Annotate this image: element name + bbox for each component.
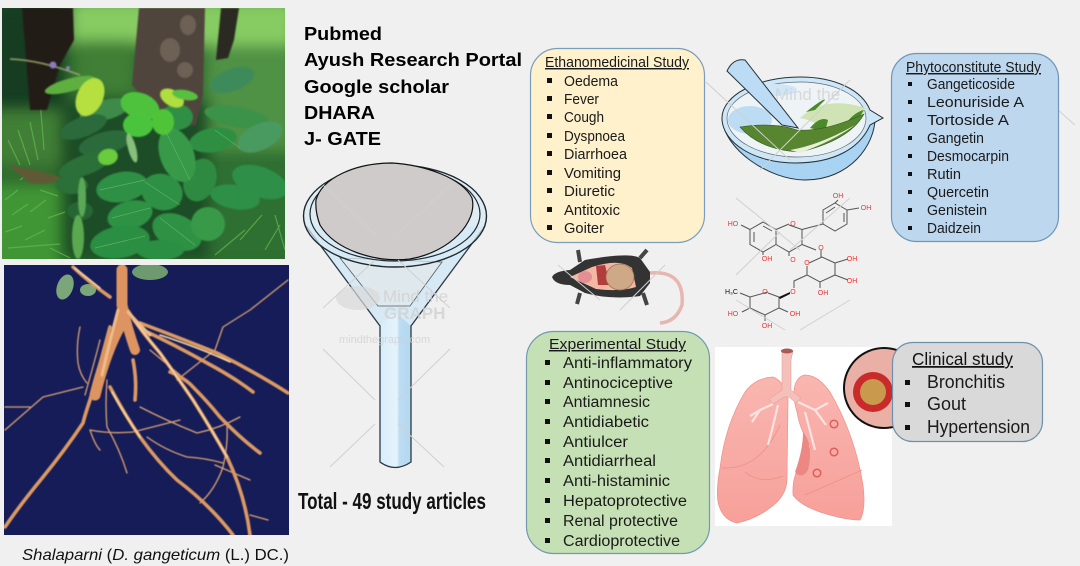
icon: flavonoid chemical structure: OH <box>861 205 871 212</box>
caption: species name: Shalaparni (D. gangeticum (L.) DC.) <box>22 547 289 564</box>
panel: Ethanomedicinal Study: Oedema <box>564 74 619 90</box>
panel: Clinical study <box>892 342 1042 442</box>
panel: Ethanomedicinal Study: Diuretic <box>564 184 615 200</box>
panel: Phytoconstitute Study: Phytoconstitute Study <box>906 60 1042 76</box>
panel: Phytoconstitute Study: Desmocarpin <box>927 149 1009 165</box>
panel: Ethanomedicinal Study: Antitoxic <box>564 203 620 219</box>
icon: flavonoid chemical structure: OH <box>818 290 828 297</box>
panel: Ethanomedicinal Study: Dyspnoea <box>564 129 626 145</box>
panel: Ethanomedicinal Study: Goiter <box>564 221 604 237</box>
list of databases: J- GATE <box>304 128 381 149</box>
panel: Phytoconstitute Study: Tortoside A <box>927 113 1009 129</box>
illustration: lungs <box>715 347 892 526</box>
panel: Clinical study: Hypertension <box>927 417 1030 437</box>
panel: Clinical study: Gout <box>927 394 966 414</box>
panel: Phytoconstitute Study <box>892 54 1058 242</box>
icon: flavonoid chemical structure: HO <box>728 311 739 318</box>
photo: Shalaparni plant <box>2 8 285 259</box>
panel: Phytoconstitute Study: Leonuriside A <box>927 95 1024 111</box>
panel: Experimental Study: Hepatoprotective <box>563 493 687 510</box>
panel: Experimental Study: Renal protective <box>563 513 678 530</box>
text: Mind the <box>775 85 840 104</box>
panel: Experimental Study: Antidiabetic <box>563 414 649 431</box>
icon: flavonoid chemical structure: O <box>790 221 796 228</box>
panel: Ethanomedicinal Study: Ethanomedicinal Study <box>545 55 690 71</box>
panel: Experimental Study: Antiulcer <box>563 434 628 451</box>
icon: filter funnel <box>304 163 486 468</box>
icon: flavonoid chemical structure: OH <box>833 193 843 200</box>
panel: Ethanomedicinal Study: Fever <box>564 92 599 108</box>
panel: Experimental Study: Antiamnesic <box>563 394 650 411</box>
panel: Experimental Study: Experimental Study <box>549 337 687 353</box>
panel: Experimental Study: Antinociceptive <box>563 375 673 392</box>
panel: Phytoconstitute Study: Daidzein <box>927 221 981 237</box>
photo: Shalaparni root <box>4 264 289 535</box>
icon: bronchus cross-section <box>843 347 897 429</box>
panel: Experimental Study: Anti-inflammatory <box>563 355 692 372</box>
text: GRAPH <box>384 304 445 323</box>
funnel total label: Total - 49 study articles <box>298 488 486 514</box>
text: mindthegraph.com <box>339 334 430 346</box>
icon: dissected mouse <box>552 250 682 323</box>
panel: Phytoconstitute Study: Genistein <box>927 203 987 219</box>
icon: flavonoid chemical structure: H₃C <box>725 289 738 296</box>
panel: Clinical study: Clinical study <box>912 349 1013 369</box>
icon: flavonoid chemical structure: O <box>790 289 796 296</box>
panel: Experimental Study: Anti-histaminic <box>563 473 670 490</box>
list of databases: Pubmed <box>304 23 382 44</box>
panel: Ethanomedicinal Study: Vomiting <box>564 166 621 182</box>
list of databases: Google scholar <box>304 76 449 97</box>
list of databases: DHARA <box>304 102 375 123</box>
icon: flavonoid chemical structure: O <box>804 260 810 267</box>
icon: mortar with leaf <box>722 60 883 180</box>
list of databases <box>304 23 522 149</box>
list of databases: Ayush Research Portal <box>304 49 522 70</box>
panel: Phytoconstitute Study: Quercetin <box>927 185 989 201</box>
panel: Clinical study: Bronchitis <box>927 372 1005 392</box>
icon: flavonoid chemical structure: OH <box>847 256 857 263</box>
icon: flavonoid chemical structure: HO <box>728 221 739 228</box>
icon: flavonoid chemical structure: OH <box>790 311 800 318</box>
text: Mind the <box>383 287 448 306</box>
panel: Phytoconstitute Study: Gangeticoside <box>927 77 1015 93</box>
icon: flavonoid chemical structure: O <box>790 257 796 264</box>
icon: flavonoid chemical structure: OH <box>762 323 772 330</box>
panel: Phytoconstitute Study: Gangetin <box>927 131 984 147</box>
panel: Ethanomedicinal Study: Diarrhoea <box>564 147 628 163</box>
panel: Phytoconstitute Study: Rutin <box>927 167 961 183</box>
panel: Ethanomedicinal Study: Cough <box>564 110 604 126</box>
panel: Ethanomedicinal Study <box>530 48 704 242</box>
panel: Experimental Study: Antidiarrheal <box>563 453 656 470</box>
icon: flavonoid chemical structure <box>725 193 871 330</box>
icon: flavonoid chemical structure: OH <box>762 256 772 263</box>
panel: Experimental Study <box>526 332 710 554</box>
icon: flavonoid chemical structure: O <box>762 289 768 296</box>
icon: flavonoid chemical structure: OH <box>847 278 857 285</box>
panel: Experimental Study: Cardioprotective <box>563 533 680 550</box>
icon: flavonoid chemical structure: O <box>818 245 824 252</box>
